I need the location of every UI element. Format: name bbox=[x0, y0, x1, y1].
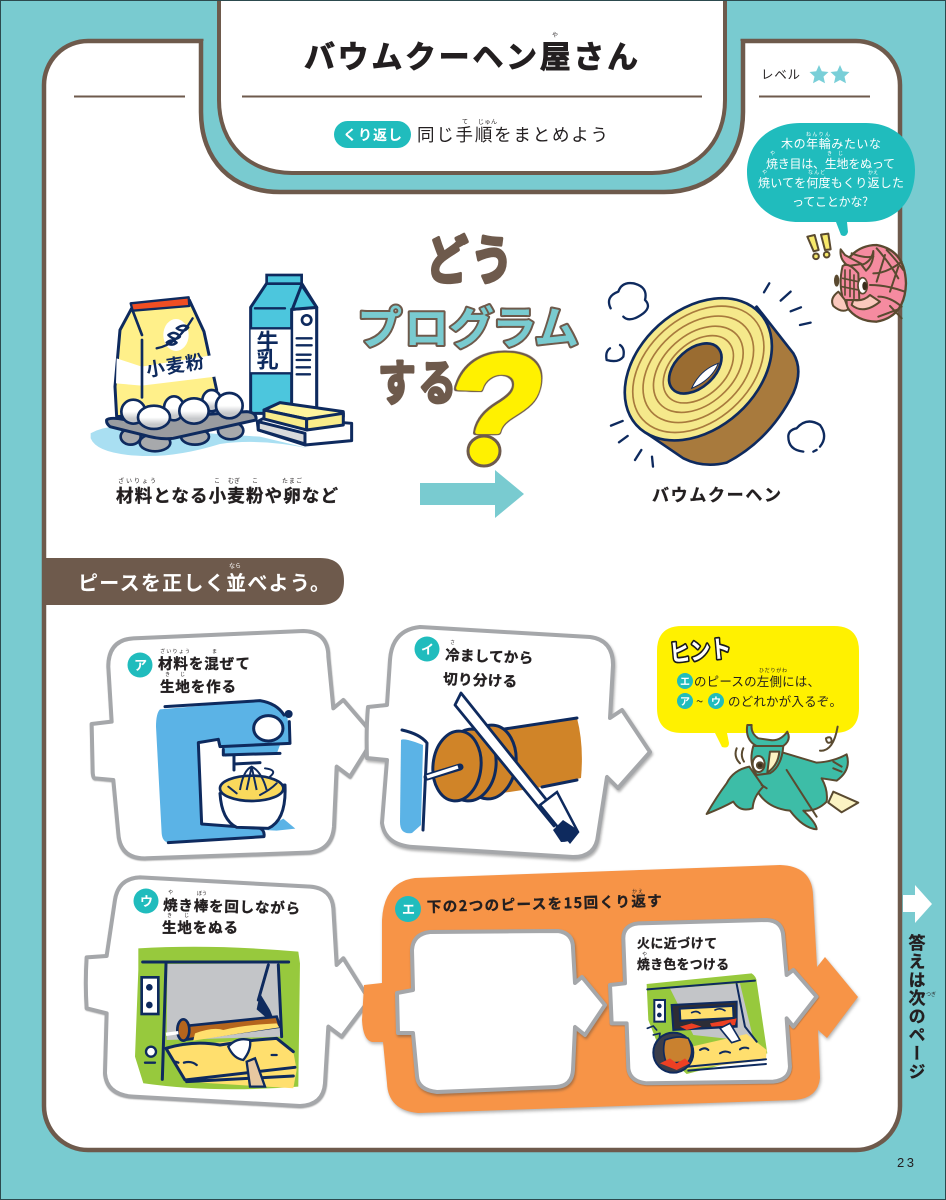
banner: arrange the pieces: ピースを正しく並べよう。 bbox=[78, 567, 330, 596]
level bbox=[761, 64, 850, 83]
label: きじ bbox=[165, 671, 185, 678]
icon: roller and knife bbox=[400, 693, 582, 842]
speech bubble: や bbox=[770, 150, 775, 157]
label: 焼き棒を回しながら bbox=[163, 894, 300, 919]
badge: ア bbox=[134, 655, 147, 674]
badge: ウ bbox=[140, 891, 153, 910]
headline: dou programming: プログラム bbox=[357, 292, 579, 357]
next page note: つぎ bbox=[926, 991, 936, 998]
illustration: ingredients bbox=[91, 275, 352, 456]
caption: ingredients: こ bbox=[214, 476, 220, 485]
exclamation marks bbox=[807, 234, 831, 259]
label: 火に近づけて bbox=[637, 933, 717, 952]
header rules bbox=[74, 96, 870, 98]
caption: ingredients: 材料となる小麦粉や卵など bbox=[116, 483, 338, 508]
title tab bbox=[201, 0, 743, 192]
label: 切り分ける bbox=[443, 668, 518, 692]
label: 冷ましてから bbox=[445, 644, 534, 668]
egg tray bbox=[107, 390, 256, 451]
subtitle furigana: て bbox=[462, 117, 468, 126]
flour bag bbox=[115, 297, 217, 417]
badge bbox=[134, 888, 158, 914]
label: 焼き色をつける bbox=[637, 954, 729, 973]
piece I: cool and cut bbox=[367, 627, 650, 857]
illustration: baumkuchen bbox=[597, 269, 824, 469]
speech bubble: 焼き目は、生地をぬって bbox=[766, 155, 895, 172]
badge bbox=[414, 636, 440, 662]
caption: baumkuchen: バウムクーヘン bbox=[652, 481, 781, 506]
speech bubble bbox=[747, 123, 915, 236]
cake side bbox=[647, 307, 798, 465]
character: armadillo bbox=[832, 245, 906, 322]
hint heading: ヒント bbox=[668, 629, 732, 669]
label: 生地を作る bbox=[160, 676, 236, 697]
piece E: repeat block bbox=[362, 865, 858, 1113]
milk carton: 乳 bbox=[257, 342, 279, 374]
label: や bbox=[642, 951, 647, 958]
caption: ingredients: ざいりょう bbox=[118, 476, 156, 485]
page number: 23 bbox=[897, 1155, 916, 1170]
label: や bbox=[168, 889, 173, 896]
hint text bbox=[677, 667, 842, 710]
steam puffs and motion lines bbox=[606, 283, 824, 467]
label: ぼう bbox=[197, 890, 207, 897]
label: ま bbox=[212, 648, 217, 655]
speech bubble: きじ bbox=[827, 150, 843, 157]
cake top rings bbox=[597, 269, 800, 469]
icon: oven coating bbox=[135, 947, 300, 1089]
banner: arrange the pieces: なら bbox=[229, 561, 241, 570]
arrow bbox=[420, 470, 524, 518]
caption: ingredients: むぎ bbox=[228, 476, 240, 485]
hint text: のピースの左側には、 bbox=[694, 671, 820, 690]
subtitle bbox=[334, 117, 608, 148]
label: 生地をぬる bbox=[162, 917, 238, 938]
hint text: ウ bbox=[711, 693, 721, 708]
subtitle text: 同じ手順をまとめよう bbox=[417, 122, 608, 147]
label bbox=[158, 648, 250, 697]
label: 材料を混ぜて bbox=[158, 653, 250, 674]
headline: dou programming: どう bbox=[426, 218, 513, 294]
speech bubble: 焼いてを何度もくり返した bbox=[758, 174, 904, 191]
subtitle: じゅん bbox=[478, 117, 497, 126]
label: さ bbox=[450, 639, 455, 646]
icon: stars bbox=[810, 65, 850, 83]
label: きじ bbox=[167, 912, 189, 919]
icon: oven baking bbox=[647, 973, 767, 1074]
milk carton: 牛 bbox=[257, 324, 279, 356]
level: レベル bbox=[761, 64, 800, 83]
speech bubble: なんど bbox=[808, 169, 825, 176]
question mark: ? bbox=[432, 324, 558, 498]
speech bubble: かえ bbox=[868, 169, 878, 176]
badge: エ bbox=[402, 899, 415, 918]
label: かえ bbox=[632, 888, 643, 895]
piece: bake bbox=[610, 920, 817, 1083]
speech bubble: や bbox=[762, 169, 767, 176]
label: 下の2つのピースを15回くり返す bbox=[427, 890, 662, 917]
hint text: ~ bbox=[696, 691, 703, 710]
label bbox=[443, 639, 534, 692]
speech bubble: 木の年輪みたいな bbox=[781, 135, 881, 152]
floor shadow bbox=[91, 427, 308, 456]
label bbox=[637, 933, 729, 973]
title furigana: や bbox=[552, 30, 558, 39]
caption: ingredients: こ bbox=[252, 476, 258, 485]
banner: arrange the pieces bbox=[44, 558, 344, 605]
hint text: のどれかが入るぞ。 bbox=[728, 691, 842, 710]
piece U: coat with batter bbox=[86, 877, 369, 1106]
butter bbox=[257, 403, 352, 445]
empty piece slot bbox=[397, 931, 605, 1092]
headline: dou programming: する bbox=[378, 344, 456, 414]
hint text: ひだりがわ bbox=[759, 667, 787, 674]
badge bbox=[395, 896, 421, 922]
next page note: 答えは次のページ bbox=[904, 933, 930, 1081]
speech bubble: ってことかな? bbox=[792, 193, 868, 210]
badge: repeat: くり返し bbox=[343, 125, 402, 145]
next page arrow bbox=[903, 885, 932, 923]
title: バウムクーヘン屋さん bbox=[304, 32, 638, 77]
flour bag: 小麦粉 bbox=[144, 347, 206, 383]
hint text: エ bbox=[680, 673, 690, 688]
milk carton bbox=[251, 275, 317, 415]
piece A: mix batter bbox=[92, 631, 375, 858]
character: owl bbox=[707, 725, 858, 829]
badge: repeat bbox=[334, 121, 411, 148]
icon: mixer bbox=[156, 701, 295, 843]
headline: dou programming bbox=[357, 218, 579, 498]
hint text: ア bbox=[680, 693, 690, 708]
label bbox=[162, 889, 300, 938]
badge: イ bbox=[421, 639, 434, 658]
caption: ingredients: たまご bbox=[282, 476, 302, 485]
hint bubble bbox=[657, 626, 859, 748]
speech bubble: ねんりん bbox=[806, 131, 830, 138]
badge bbox=[128, 652, 152, 678]
label: ざいりょう bbox=[160, 648, 190, 655]
